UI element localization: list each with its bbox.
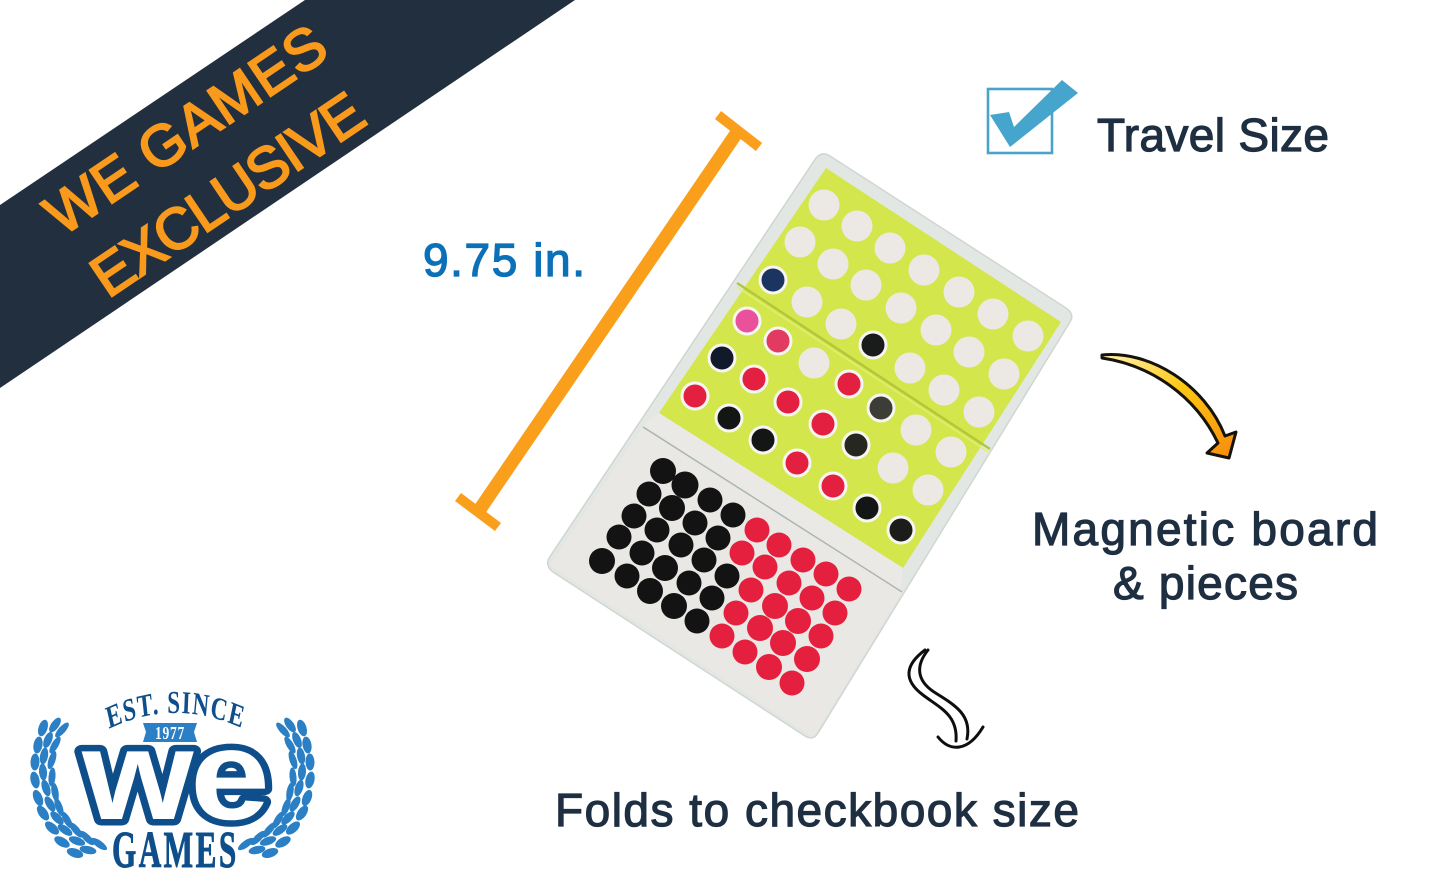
- arrow: yellow curved, pointing to magnetic board label: [1102, 355, 1236, 458]
- white pegs on board: [784, 190, 1044, 506]
- label: Magnetic board & pieces: [1032, 503, 1378, 609]
- label: Travel Size: Travel Size: [1097, 109, 1329, 161]
- banner: WE Games Exclusive: [0, 0, 575, 388]
- logo: EST. SINCE arc text: EST. SINCE: [104, 692, 244, 729]
- icon: checkbox: [988, 80, 1078, 153]
- red spare pieces: [710, 518, 862, 696]
- logo: right laurel: [236, 716, 316, 860]
- board: yellow play area: [659, 168, 1061, 568]
- label: Magnetic board & pieces: & pieces: [1113, 557, 1298, 609]
- folding game board: [548, 154, 1072, 738]
- label: Magnetic board & pieces: Magnetic board: [1032, 503, 1378, 555]
- banner text: EXCLUSIVE: EXCLUSIVE: [79, 80, 376, 310]
- banner text: WE GAMES: WE GAMES: [33, 12, 339, 248]
- logo: GAMES: GAMES: [112, 822, 236, 879]
- black spare pieces: [589, 458, 746, 634]
- label: Folds to checkbook size: Folds to checkbook size: [555, 784, 1079, 836]
- logo: 1977 ribbon: 1977: [155, 724, 185, 744]
- logo: WE wordmark: we: [81, 703, 266, 846]
- dimension bar: 9.75 in.: [458, 115, 759, 527]
- logo: WE Games: [30, 692, 315, 879]
- board: flap between yellow area and fold: [643, 413, 903, 590]
- logo: 1977 ribbon: [143, 723, 197, 744]
- board: lower panel: [550, 427, 902, 737]
- dimension label: 9.75 in.: [423, 234, 585, 286]
- arrow: black squiggle, pointing to folds label: [909, 650, 983, 747]
- board: plastic sleeve: [548, 154, 1072, 738]
- logo: left laurel: [29, 716, 109, 860]
- played pieces on board: [682, 267, 914, 543]
